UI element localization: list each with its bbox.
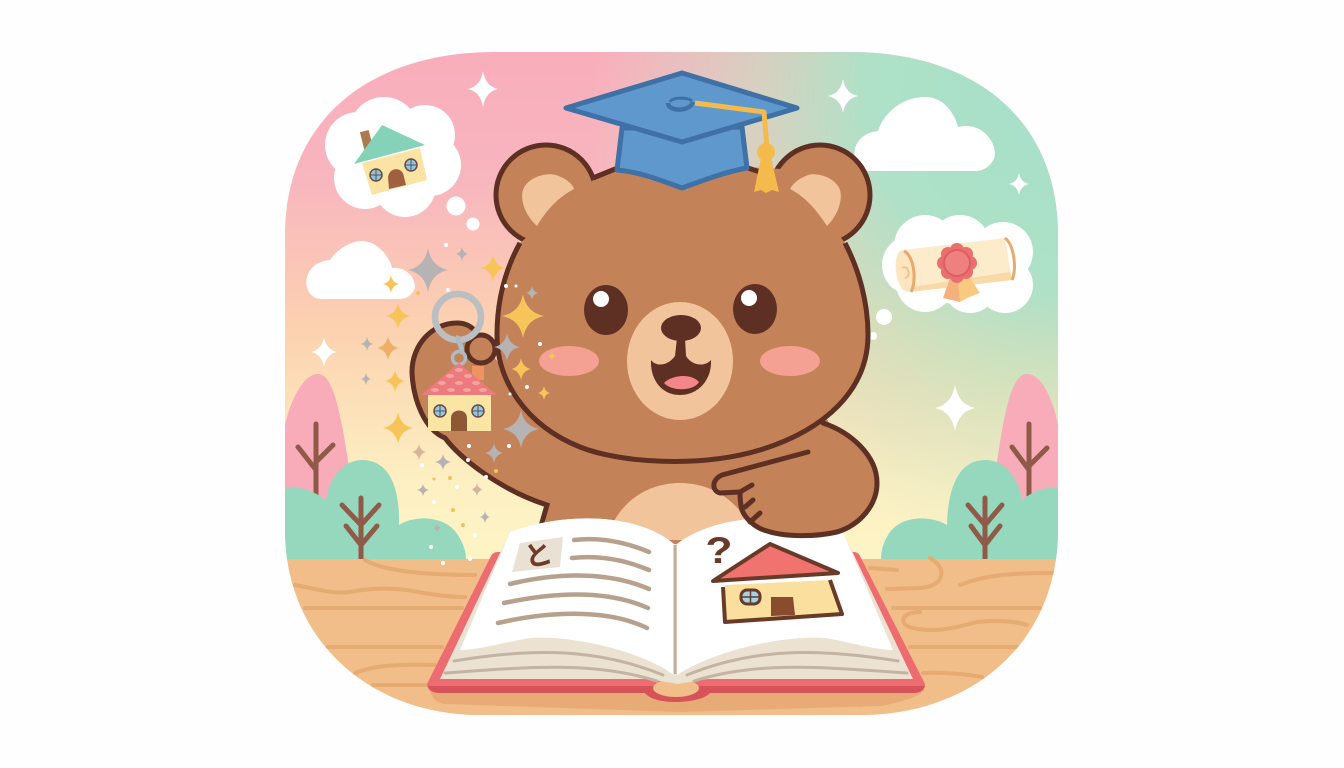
- bear: cheeks: [539, 346, 820, 376]
- icon: left cloud: [306, 241, 415, 299]
- character tile: と: [522, 537, 555, 574]
- character tile: [512, 537, 563, 574]
- icon: tan sparkles: [412, 444, 482, 495]
- bear: eyes: [584, 284, 777, 335]
- bear: ears and head: [496, 145, 870, 461]
- thought bubble: diploma: [869, 215, 1033, 340]
- key link: [458, 336, 462, 354]
- panel: rounded scene background: [285, 52, 1058, 715]
- bear: muzzle: [627, 302, 733, 420]
- icon: open book: [427, 518, 925, 712]
- text lines on left page: [498, 539, 649, 628]
- book cover: [427, 552, 925, 702]
- icon: right pink tree: [997, 374, 1058, 558]
- keyring: [435, 294, 481, 340]
- icon: left pink tree: [285, 374, 348, 558]
- book house drawing: [713, 544, 842, 622]
- icon: white sparkles: [311, 71, 1029, 431]
- bear: nose and mouth: [651, 315, 711, 395]
- thought bubble: house: [325, 97, 480, 230]
- icon: bear thumb: [467, 335, 495, 380]
- icon: left bushes: [285, 460, 466, 560]
- icon: top right cloud: [854, 97, 995, 171]
- bear: pointing arm: [714, 423, 877, 536]
- icon: grey sparkles: [361, 247, 539, 533]
- icon: glitter dots: [416, 243, 542, 565]
- diploma seal: [937, 243, 977, 283]
- house charm: [428, 395, 491, 431]
- panel: wooden table: [285, 558, 1058, 715]
- icon: house keychain: [421, 294, 497, 431]
- icon: right bushes: [881, 460, 1058, 560]
- bear: body and raised arm: [412, 300, 835, 560]
- tassel: [695, 103, 767, 148]
- bear: belly patch: [607, 483, 755, 540]
- question mark: ?: [705, 530, 733, 571]
- icon: orange sparkle: [377, 336, 399, 360]
- illustration: bear scholar: [285, 52, 1058, 715]
- book pages: [440, 518, 913, 684]
- icon: graduation cap: [566, 73, 797, 193]
- icon: gold sparkles: [383, 254, 556, 444]
